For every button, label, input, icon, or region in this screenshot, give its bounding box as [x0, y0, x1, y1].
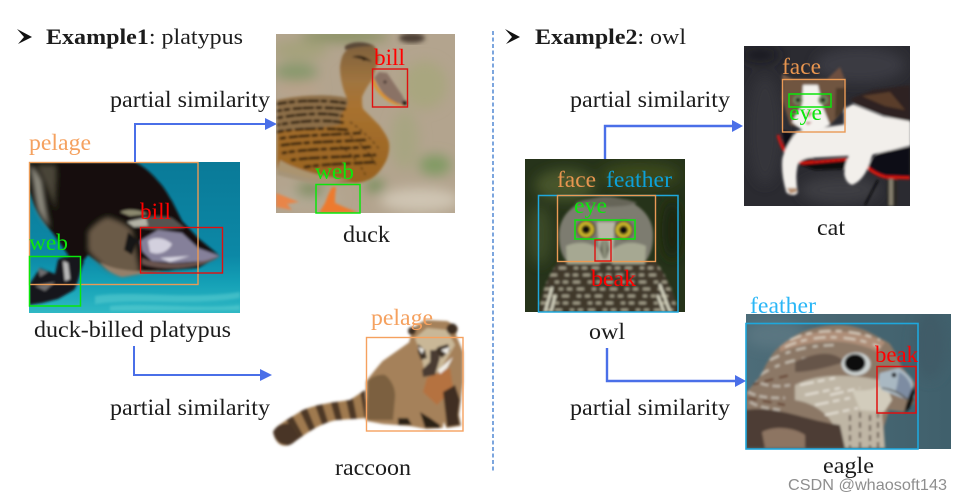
- box: bill on platypus: [140, 228, 222, 273]
- label: face on owl: face: [557, 167, 596, 192]
- caption: owl: owl: [589, 319, 625, 344]
- label: partial similarity (raccoon): partial similarity: [110, 395, 271, 420]
- label: feather on owl: feather: [606, 167, 672, 192]
- caption: cat: cat: [817, 215, 846, 240]
- label: web: web: [29, 230, 68, 255]
- arrow: platypus to duck: [135, 118, 277, 162]
- dashed divider between examples: [492, 31, 494, 471]
- label: face on cat: face: [782, 54, 821, 79]
- panel: eagle photo: [745, 310, 951, 449]
- box: bill on duck: [372, 69, 408, 107]
- box: web on duck: [316, 184, 360, 213]
- icon: arrowhead bullet: [17, 29, 32, 44]
- box: pelage on platypus: [30, 162, 198, 284]
- label: web on duck: web: [315, 159, 354, 184]
- label: pelage on raccoon: pelage: [371, 305, 433, 330]
- caption: eagle: eagle: [823, 453, 874, 478]
- caption: duck-billed platypus: duck-billed platypus: [34, 317, 231, 342]
- panel: owl photo: [525, 159, 685, 312]
- label: feather on eagle: feather: [750, 293, 816, 318]
- panel: duck photo: [272, 30, 460, 213]
- caption: raccoon: raccoon: [335, 455, 412, 480]
- caption: duck: duck: [343, 222, 391, 247]
- label: beak on owl: beak: [591, 266, 637, 291]
- arrow: owl to cat: [605, 120, 743, 159]
- watermark: CSDN @whaosoft143: [788, 477, 947, 494]
- label: pelage: pelage: [29, 130, 91, 155]
- box: beak on owl: [595, 240, 611, 261]
- box: beak on eagle: [877, 366, 916, 413]
- box: pelage on raccoon: [366, 338, 463, 431]
- box: face on cat: [782, 80, 845, 132]
- box: eye on cat: [789, 94, 831, 107]
- icon: arrowhead bullet: [505, 29, 520, 44]
- arrow: platypus to raccoon: [134, 346, 272, 381]
- text: Example1 platypus: Example1 : platypus: [46, 24, 243, 49]
- box: web on platypus: [30, 256, 80, 306]
- label: bill on duck: bill: [374, 45, 405, 70]
- label: partial similarity (duck): partial similarity: [110, 87, 271, 112]
- label: eye on owl: eye: [574, 193, 607, 218]
- box: eye on owl: [575, 220, 635, 239]
- box: feather on owl: [538, 196, 678, 312]
- label: bill: bill: [140, 199, 171, 224]
- box: feather on eagle: [746, 324, 918, 449]
- heading: Example2: [505, 24, 686, 49]
- arrow: owl to eagle: [607, 348, 746, 387]
- panel: cat photo: [740, 46, 910, 206]
- heading: Example1: [17, 24, 243, 49]
- label: partial similarity (cat): partial similarity: [570, 87, 731, 112]
- panel: platypus photo: [29, 162, 240, 313]
- label: partial similarity (eagle): partial similarity: [570, 395, 731, 420]
- text: Example2 owl: Example2 : owl: [535, 24, 686, 49]
- box: face on owl: [558, 196, 656, 262]
- illustration: raccoon: [273, 321, 462, 446]
- label: eye on cat: eye: [789, 100, 822, 125]
- label: beak on eagle: beak: [875, 342, 918, 367]
